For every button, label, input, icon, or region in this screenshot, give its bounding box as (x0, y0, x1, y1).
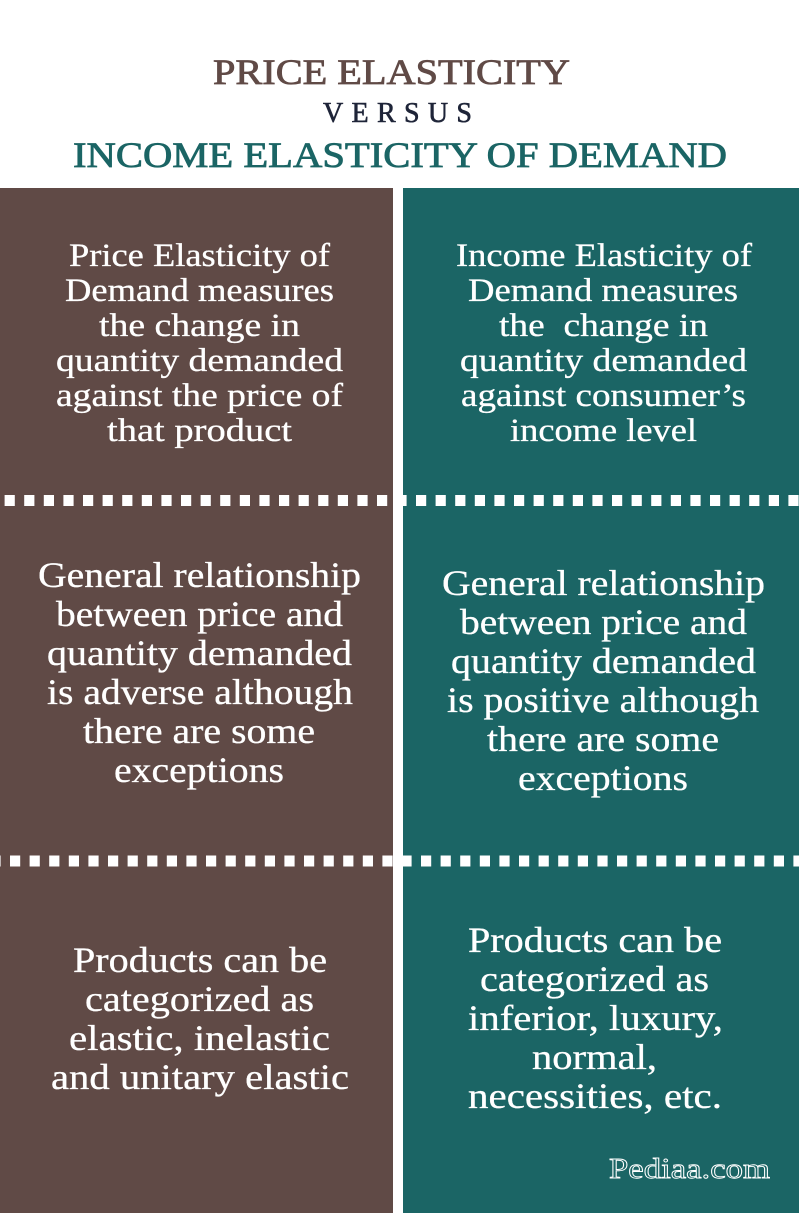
text: price definition: against the price of (56, 378, 343, 414)
text: price categories: elastic, inelastic (69, 1018, 330, 1058)
heading: income elasticity of demand: INCOME ELASTICITY OF DEMAND (73, 135, 727, 175)
text: price definition: that product (107, 413, 292, 449)
text: price categories: Products can be (73, 940, 327, 980)
panel: price elasticity column (0, 188, 393, 1213)
text: price relationship: exceptions (114, 750, 284, 790)
text: price categories: categorized as (85, 979, 314, 1019)
text: price definition: the change in (99, 308, 300, 344)
text: income definition (456, 238, 752, 449)
text: income relationship: there are some (487, 719, 719, 759)
text: price relationship: there are some (83, 711, 315, 751)
text: price definition: Demand measures (65, 273, 334, 309)
text: income categories: Products can be (468, 920, 722, 960)
logo: Pediaa.com: Pediaa.com (609, 1153, 771, 1185)
text: price relationship: quantity demanded (47, 633, 352, 673)
title (73, 52, 727, 175)
text: income categories: inferior, luxury, (468, 998, 723, 1038)
panel: income elasticity column (403, 188, 799, 1213)
text: income definition: Income Elasticity of (456, 238, 752, 274)
text: income relationship: exceptions (518, 758, 688, 798)
heading: price elasticity: PRICE ELASTICITY (213, 52, 570, 92)
text: price relationship: between price and (56, 594, 343, 634)
text: price definition: quantity demanded (56, 343, 344, 379)
text: income relationship (442, 563, 765, 798)
text: income categories: normal, (532, 1037, 657, 1077)
text: income definition: Demand measures (468, 273, 738, 309)
text: price relationship (38, 555, 361, 790)
text: price relationship: General relationship (38, 555, 361, 595)
text: price definition (56, 238, 344, 449)
text: income definition: the change in (499, 308, 708, 344)
heading: versus: VERSUS (323, 98, 472, 129)
text: income relationship: between price and (460, 602, 747, 642)
text: price definition: Price Elasticity of (69, 238, 330, 274)
text: price categories: and unitary elastic (51, 1057, 349, 1097)
text: income definition: against consumer’s (461, 378, 746, 414)
text: income categories: necessities, etc. (468, 1076, 722, 1116)
text: income relationship: General relationship (442, 563, 765, 603)
text: price relationship: is adverse although (47, 672, 353, 712)
text: income relationship: is positive although (447, 680, 759, 720)
text: income categories: categorized as (480, 959, 709, 999)
text: income categories (468, 920, 723, 1116)
text: income definition: quantity demanded (460, 343, 748, 379)
text: income definition: income level (510, 413, 697, 449)
text: income relationship: quantity demanded (451, 641, 756, 681)
text: price categories (51, 940, 349, 1097)
